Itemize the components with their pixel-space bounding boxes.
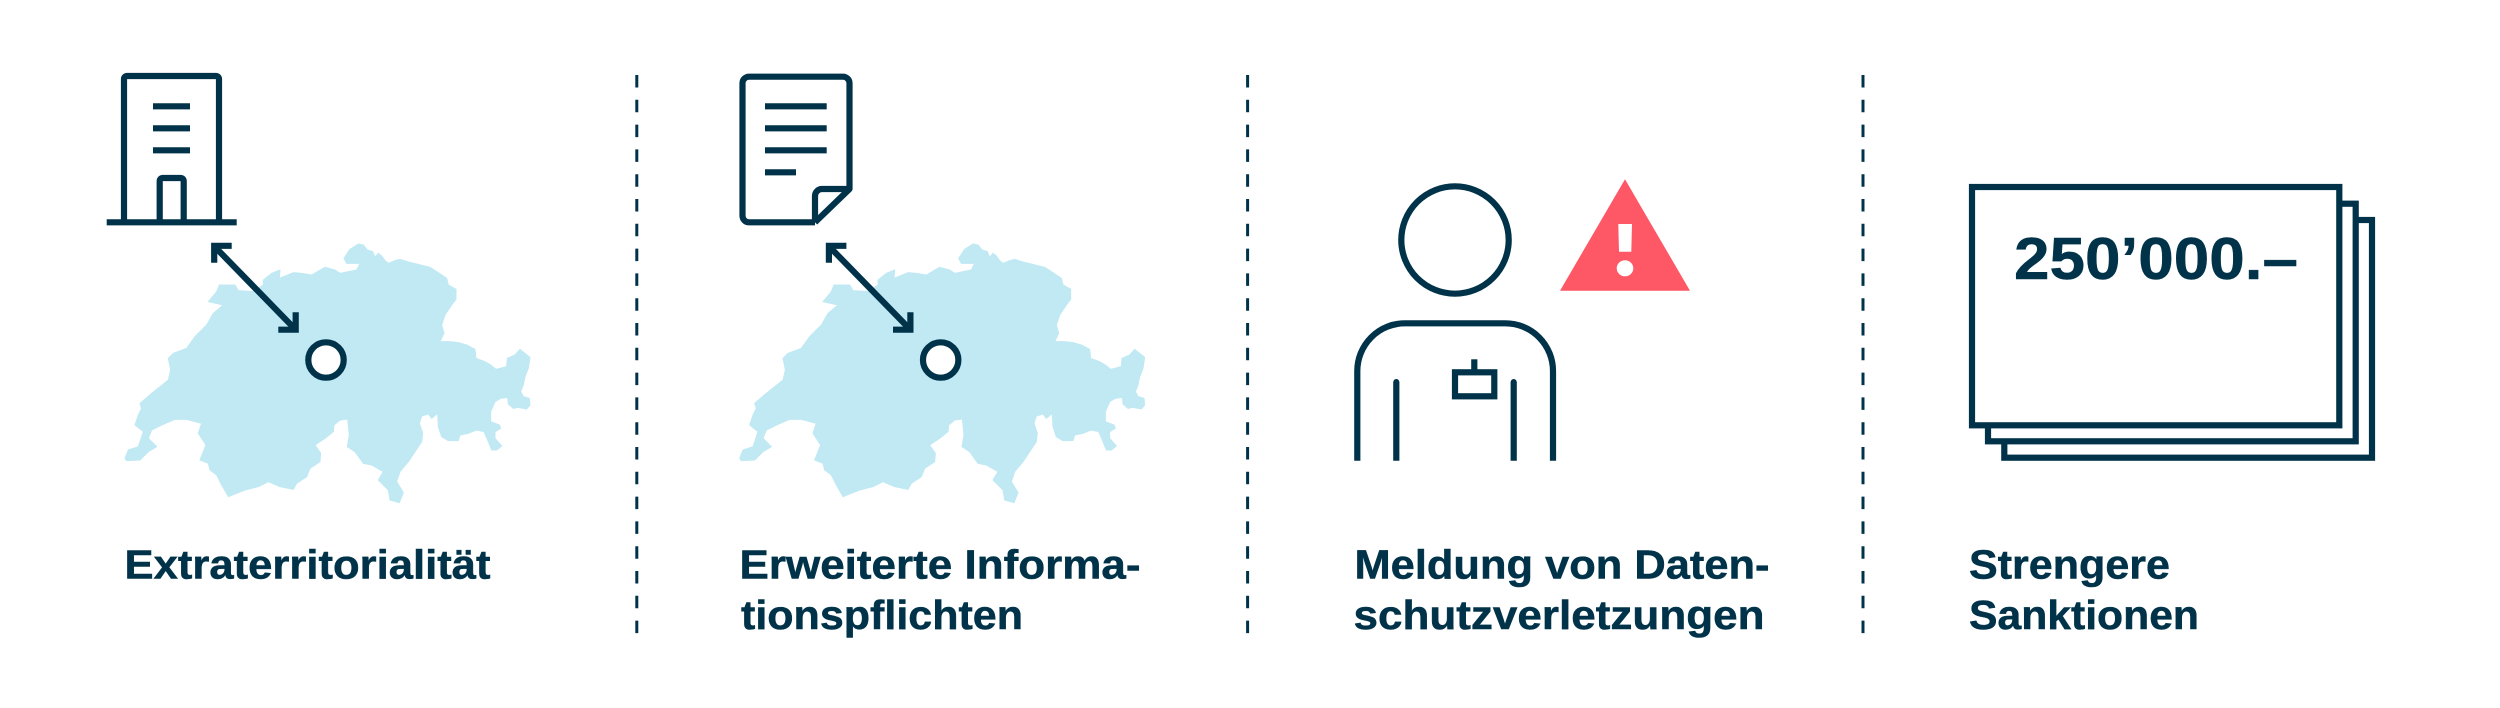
panel: Meldung von Datenschutzverletzungen [1354,179,1781,638]
label: Strengere Sanktionen: Sanktionen [1969,592,2199,638]
panel: Extraterritorialität [107,76,530,588]
label: Erweiterte Informationspflichten: tionspflichten [741,592,1023,638]
label: Strengere Sanktionen: Strengere [1969,542,2170,588]
panel: Strengere Sanktionen [1969,187,2372,638]
label: Meldung von Datenschutzverletzungen: Meldung von Daten- [1354,542,1770,588]
label: Meldung von Datenschutzverletzungen: schutzverletzungen [1354,592,1764,638]
amount: 250'000.–: 250’000.– [2014,226,2298,292]
divider 3 [1862,75,1864,634]
label: Extraterritorialität: Extraterritorialität [124,542,491,588]
map: Switzerland [125,244,530,503]
icon: office building [107,76,237,222]
divider 2 [1246,75,1249,634]
map: Switzerland [740,244,1145,503]
icon: person with badge [1357,186,1553,461]
icon: stacked fine notices [1972,187,2372,458]
icon: warning triangle [1560,179,1690,291]
panel: Erweiterte Informationspflichten [740,77,1152,638]
label: Erweiterte Informationspflichten: Erweiterte Informa- [740,542,1140,588]
arrow: double-headed distance [829,246,910,330]
divider 1 [635,75,638,634]
icon: location marker [308,342,344,378]
icon: location marker [923,342,958,378]
icon: document [742,77,850,222]
arrow: double-headed distance [214,246,296,330]
